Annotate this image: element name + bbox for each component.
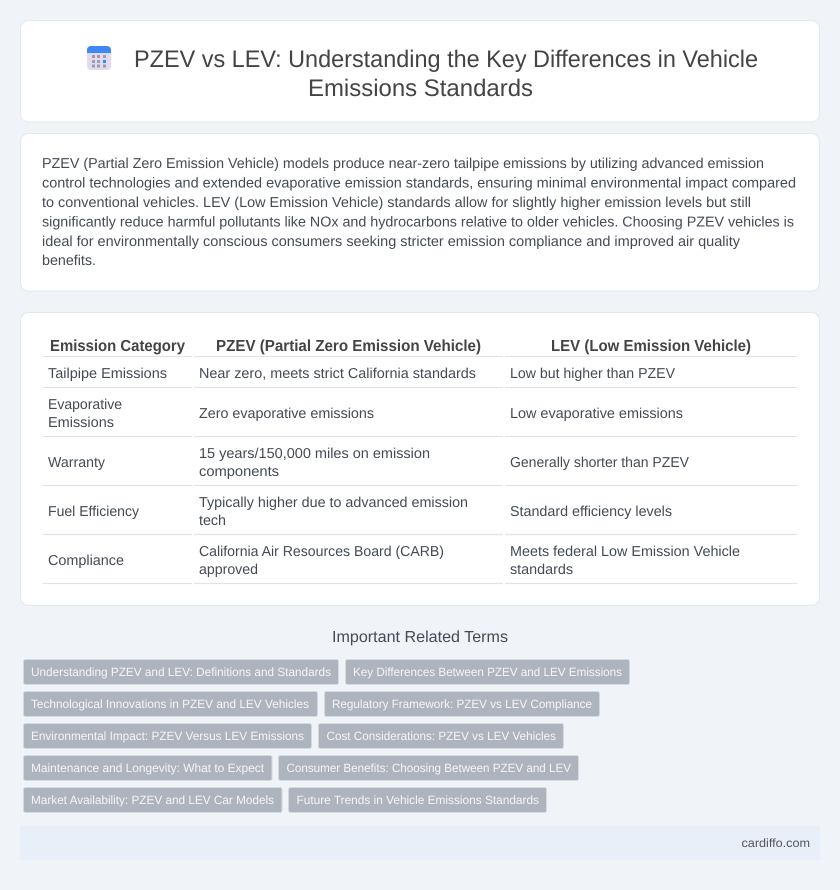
footer: [20, 826, 820, 860]
row: compliance: [48, 544, 740, 578]
related term tags: Environmental Impact: PZEV Versus LEV Emissions: [31, 729, 304, 743]
row: fuel efficiency: [48, 495, 672, 529]
row: tailpipe emissions: Tailpipe Emissions: [48, 366, 167, 382]
text block: intro paragraph: ideal for environmentally conscious consumers seeking stricter emission compliance and improved air quality: [42, 234, 741, 250]
table header: PZEV (Partial Zero Emission Vehicle): [216, 338, 481, 355]
table rules: [43, 356, 797, 584]
title: [134, 46, 758, 102]
row: compliance: Meets federal Low Emission Vehicle: [510, 544, 740, 560]
row: warranty: components: [199, 464, 279, 480]
panel: header: [20, 20, 820, 122]
footer: cardiffo.com: [742, 836, 810, 850]
text block: intro paragraph: significantly reduce harmful pollutants like NOx and hydrocarbons relative to older vehicles. Choosing PZEV vehicles is: [42, 214, 794, 230]
row: tailpipe emissions: Near zero, meets strict California standards: [199, 366, 476, 382]
related term tags: Technological Innovations in PZEV and LEV Vehicles: [31, 697, 309, 711]
title: Emissions Standards: [308, 75, 533, 102]
related term tags: Cost Considerations: PZEV vs LEV Vehicles: [326, 729, 556, 743]
related term tags: Regulatory Framework: PZEV vs LEV Compliance: [332, 697, 592, 711]
row: fuel efficiency: Standard efficiency levels: [510, 504, 672, 520]
row: compliance: standards: [510, 562, 573, 578]
row: evaporative emissions: Evaporative: [48, 397, 122, 413]
related term tags: Market Availability: PZEV and LEV Car Models: [31, 793, 274, 807]
row: warranty: Generally shorter than PZEV: [510, 455, 689, 471]
table header: [50, 338, 751, 355]
panel: intro text: [20, 134, 820, 291]
title: PZEV vs LEV: Understanding the Key Differences in Vehicle: [134, 46, 758, 73]
text block: intro paragraph: PZEV (Partial Zero Emission Vehicle) models produce near-zero tailpipe emissions by utilizing advanced emission: [42, 156, 764, 172]
row: compliance: California Air Resources Board (CARB): [199, 544, 444, 560]
heading: important related terms: Important Related Terms: [332, 629, 508, 646]
row: evaporative emissions: [48, 397, 683, 431]
row: evaporative emissions: Emissions: [48, 415, 114, 431]
row: fuel efficiency: Fuel Efficiency: [48, 504, 140, 520]
row: evaporative emissions: Zero evaporative emissions: [199, 406, 374, 422]
related term tags: Understanding PZEV and LEV: Definitions and Standards: [31, 665, 331, 679]
row: tailpipe emissions: Low but higher than PZEV: [510, 366, 675, 382]
row: fuel efficiency: Typically higher due to advanced emission: [199, 495, 468, 511]
table header: LEV (Low Emission Vehicle): [551, 338, 751, 355]
text block: intro paragraph: to conventional vehicles. LEV (Low Emission Vehicle) standards allow for slightly higher emission levels but still: [42, 195, 751, 211]
row: tailpipe emissions: [48, 366, 675, 382]
row: warranty: Warranty: [48, 455, 106, 471]
text block: intro paragraph: control technologies and extended evaporative emission standards, ensuring minimal environmental impact compared: [42, 175, 796, 191]
related term tags: Key Differences Between PZEV and LEV Emissions: [353, 665, 622, 679]
row: warranty: 15 years/150,000 miles on emission: [199, 446, 430, 462]
table header: Emission Category: [50, 338, 185, 355]
related term tags: Consumer Benefits: Choosing Between PZEV and LEV: [286, 761, 571, 775]
text block: intro paragraph: [42, 156, 796, 269]
row: compliance: Compliance: [48, 553, 124, 569]
row: evaporative emissions: Low evaporative emissions: [510, 406, 683, 422]
related term tags: Future Trends in Vehicle Emissions Standards: [296, 793, 539, 807]
related term tags: Maintenance and Longevity: What to Expect: [31, 761, 265, 775]
related term tags: [24, 660, 630, 812]
row: warranty: [48, 446, 689, 480]
panel: comparison table: [20, 312, 820, 606]
row: fuel efficiency: tech: [199, 513, 226, 529]
text block: intro paragraph: benefits.: [42, 253, 96, 269]
icon: calendar: [87, 46, 111, 70]
row: compliance: approved: [199, 562, 258, 578]
